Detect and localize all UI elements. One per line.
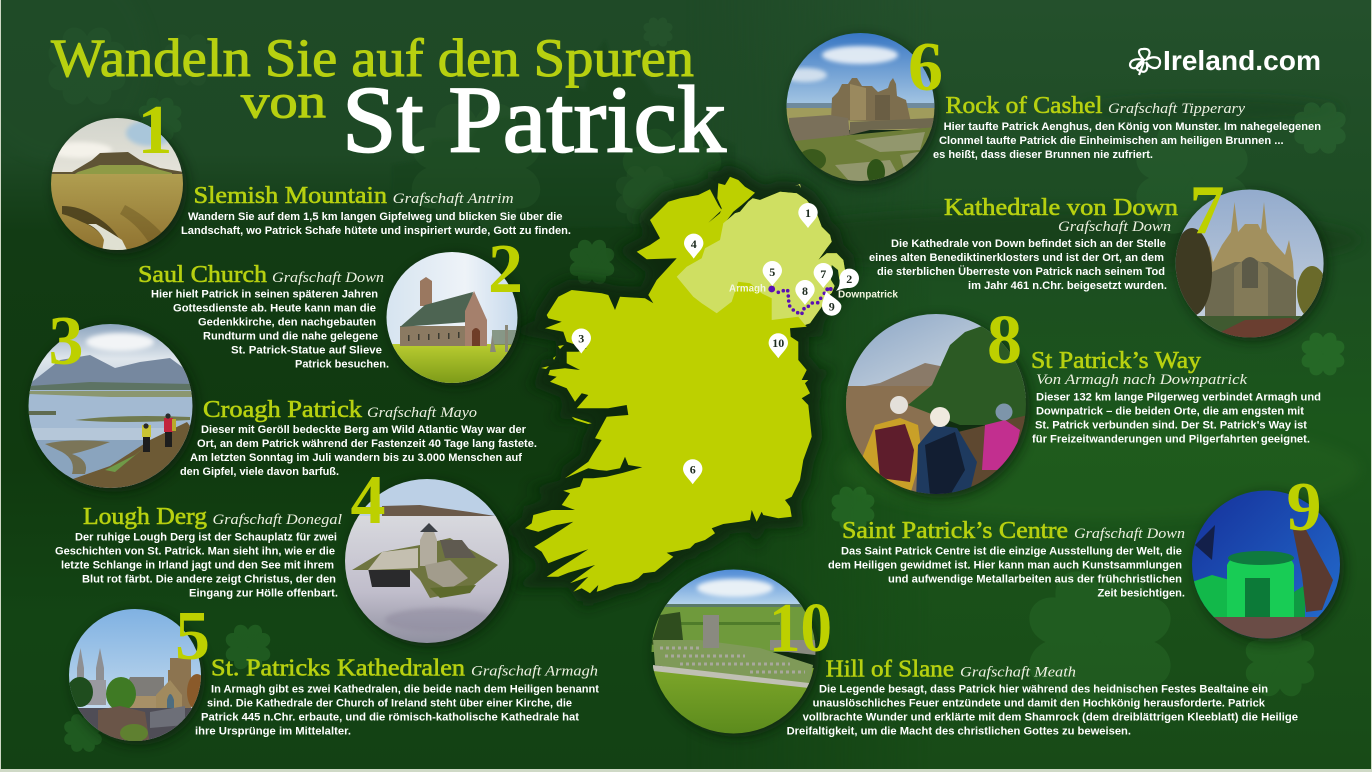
description: Patrick 445 n.Chr. erbaute, und die römisch-katholische Kathedrale hat bbox=[201, 711, 579, 723]
panel: 5 St. Patricks Kathedralen bbox=[69, 609, 599, 741]
photo: Croagh Patrick bbox=[28, 324, 193, 490]
photo: hikers on St Patrick's Way bbox=[845, 313, 1028, 500]
description: Das Saint Patrick Centre ist die einzige Ausstellung der Welt, die bbox=[841, 546, 1182, 558]
logo: Ireland.com bbox=[1130, 45, 1321, 76]
county: Grafschaft Down bbox=[1058, 219, 1171, 235]
county: Grafschaft Donegal bbox=[212, 512, 342, 528]
description: für Freizeitwanderungen und Pilgerfahrten geeignet. bbox=[1032, 434, 1310, 446]
county: Grafschaft Mayo bbox=[367, 405, 478, 421]
title word St Patrick: St Patrick bbox=[342, 67, 727, 173]
description: Hier hielt Patrick in seinen späteren Jahren bbox=[151, 289, 378, 301]
description: ihre Ursprünge im Mittelalter. bbox=[195, 725, 351, 737]
county: Grafschaft Armagh bbox=[471, 664, 598, 680]
number 10: 10 bbox=[769, 590, 832, 667]
description: Der ruhige Lough Derg ist der Schauplatz für zwei bbox=[75, 532, 337, 544]
heading: St. Patricks Kathedralen bbox=[211, 655, 465, 682]
description: den Gipfel, viele davon barfuß. bbox=[180, 466, 339, 478]
description bbox=[1032, 392, 1321, 446]
panel: 4 Lough Derg bbox=[55, 462, 510, 644]
county: Grafschaft Down bbox=[272, 270, 384, 286]
county: Grafschaft Down bbox=[1074, 526, 1185, 542]
description: die sterblichen Überreste von Patrick nach seinem Tod bbox=[877, 265, 1165, 278]
description: Geschichten von St. Patrick. Man sieht ihn, wie er die bbox=[55, 546, 335, 558]
panel: 9 Saint Patrick's Centre bbox=[828, 484, 1340, 638]
pin 1 bbox=[798, 203, 818, 228]
description: eines alten Benediktinerklosters und ist der Ort, an dem bbox=[869, 252, 1164, 264]
title word von: von bbox=[241, 76, 326, 129]
number 2: 2 bbox=[488, 231, 523, 308]
pin 6 bbox=[683, 459, 702, 484]
description: St. Patrick verbunden sind. Der St. Patrick's Way ist bbox=[1035, 420, 1307, 432]
county: Grafschaft Antrim bbox=[393, 191, 514, 207]
panel: 6 Rock of Cashel bbox=[783, 29, 1321, 185]
description: dem Heiligen gewidmet ist. Hier kann man auch Kunstsammlungen bbox=[828, 560, 1182, 572]
panel: 1 Slemish Mountain bbox=[51, 106, 570, 250]
description: Downpatrick – die beiden Orte, die am engsten mit bbox=[1036, 406, 1304, 418]
panel: 7 Kathedrale von Down bbox=[869, 187, 1324, 338]
description: Blut rot färbt. Die andere zeigt Christus, der den bbox=[82, 574, 336, 586]
pin 8 bbox=[795, 280, 815, 305]
heading: Kathedrale von Down bbox=[944, 194, 1178, 221]
map pins bbox=[572, 203, 859, 484]
description: letzte Schlange in Irland jagt und den See mit ihrem bbox=[61, 560, 334, 572]
heading: Croagh Patrick bbox=[203, 396, 363, 423]
description: Ort, an dem Patrick während der Fastenzeit 40 Tage lang fastete. bbox=[197, 438, 537, 450]
number 7: 7 bbox=[1190, 172, 1224, 249]
heading: St Patrick’s Way bbox=[1031, 347, 1202, 374]
county: Grafschaft Tipperary bbox=[1108, 101, 1245, 117]
subtitle: Von Armagh nach Downpatrick bbox=[1036, 372, 1247, 388]
description: im Jahr 461 n.Chr. beigesetzt wurden. bbox=[968, 280, 1167, 292]
label: Armagh: Armagh bbox=[729, 284, 766, 295]
description: unauslöschliches Feuer entzündete und damit den Hochkönig herausforderte. Patrick bbox=[813, 697, 1266, 709]
wordmark: Ireland.com bbox=[1163, 45, 1321, 76]
island bbox=[525, 177, 845, 593]
description: Landschaft, wo Patrick Schafe hütete und inspiriert wurde, Gott zu finden. bbox=[181, 225, 571, 237]
number 4: 4 bbox=[350, 462, 386, 539]
description: Zeit besichtigen. bbox=[1098, 588, 1185, 600]
map of Ireland bbox=[525, 177, 845, 593]
number 9: 9 bbox=[1286, 469, 1322, 546]
number 5: 5 bbox=[175, 598, 210, 675]
description: Eingang zur Hölle offenbart. bbox=[189, 588, 338, 600]
description: Gottesdienste ab. Heute kann man die bbox=[173, 303, 376, 315]
number 3: 3 bbox=[48, 303, 84, 380]
photo: Slemish Mountain bbox=[48, 117, 184, 252]
Rathlin island bbox=[795, 184, 801, 188]
panel: 3 Croagh Patrick bbox=[28, 303, 537, 490]
description: Wandern Sie auf dem 1,5 km langen Gipfelweg und blicken Sie über die bbox=[188, 211, 562, 223]
pin 3: 3 bbox=[578, 332, 584, 346]
pin 1: 1 bbox=[805, 206, 811, 220]
photo: Saint Patrick's Centre at night bbox=[1191, 490, 1341, 641]
description bbox=[869, 238, 1167, 292]
small islands bbox=[541, 345, 592, 424]
map shadow bbox=[525, 177, 845, 593]
heading: Saul Church bbox=[138, 261, 267, 288]
pin 10: 10 bbox=[772, 336, 784, 350]
pin 2 bbox=[836, 269, 859, 291]
description bbox=[787, 683, 1298, 737]
description: Hier taufte Patrick Aenghus, den König von Munster. Im nahegelegenen bbox=[944, 121, 1321, 133]
pin 4 bbox=[684, 234, 703, 259]
photo: Armagh cathedrals bbox=[67, 608, 207, 745]
description bbox=[195, 683, 599, 737]
heading: Slemish Mountain bbox=[194, 182, 387, 209]
description: und aufwendige Metallarbeiten aus der frühchristlichen bbox=[888, 574, 1182, 586]
photo: Lough Derg bbox=[345, 478, 510, 644]
description: sind. Die Kathedrale der Church of Ireland steht über einer Kirche, die bbox=[207, 697, 572, 709]
description: Gedenkkirche, den nachgebauten bbox=[198, 317, 376, 329]
panel: 10 Hill of Slane bbox=[651, 569, 1298, 737]
pin 7: 7 bbox=[820, 267, 826, 281]
pin 5 bbox=[763, 261, 782, 286]
pin 10 bbox=[769, 333, 788, 358]
description: Am letzten Sonntag im Juli wandern bis zu 3.000 Menschen auf bbox=[190, 452, 522, 464]
description: Patrick besuchen. bbox=[295, 359, 389, 371]
description: In Armagh gibt es zwei Kathedralen, die beide nach dem Heiligen benannt bbox=[211, 683, 599, 695]
pin 8: 8 bbox=[802, 284, 808, 298]
description bbox=[181, 211, 571, 237]
photo: Down Cathedral bbox=[1172, 189, 1327, 340]
panel: 2 Saul Church bbox=[139, 246, 520, 383]
photo: Saul Church bbox=[386, 252, 518, 384]
number 6: 6 bbox=[908, 29, 943, 106]
heading: Hill of Slane bbox=[826, 656, 954, 683]
title bbox=[51, 28, 727, 173]
background: Rock of Cashel silhouette bbox=[392, 40, 735, 230]
route: St Patrick's Way, dotted bbox=[768, 286, 833, 315]
description: Die Kathedrale von Down befindet sich an der Stelle bbox=[891, 238, 1166, 250]
Northern Ireland region bbox=[677, 192, 845, 325]
pin 5: 5 bbox=[769, 265, 775, 279]
pin 9 bbox=[822, 291, 841, 316]
description: Dreifaltigkeit, um die Macht des christlichen Gottes zu beweisen. bbox=[787, 725, 1131, 737]
description: es heißt, dass dieser Brunnen nie zufriert. bbox=[933, 149, 1153, 161]
label: Downpatrick: Downpatrick bbox=[838, 289, 898, 300]
number 8: 8 bbox=[987, 302, 1022, 379]
panel: 8 St Patrick's Way bbox=[845, 302, 1321, 500]
description: St. Patrick-Statue auf Slieve bbox=[231, 345, 382, 357]
pin 4: 4 bbox=[691, 237, 697, 251]
description bbox=[933, 121, 1321, 161]
description bbox=[55, 532, 338, 600]
pin 7 bbox=[814, 263, 833, 288]
description: Dieser 132 km lange Pilgerweg verbindet Armagh und bbox=[1036, 392, 1321, 404]
heading: Saint Patrick’s Centre bbox=[842, 517, 1068, 544]
description bbox=[828, 546, 1185, 600]
pin 6: 6 bbox=[690, 462, 696, 476]
heading: Lough Derg bbox=[83, 503, 207, 530]
description bbox=[151, 289, 389, 371]
description: Clonmel taufte Patrick die Einheimischen am heiligen Brunnen ... bbox=[939, 135, 1284, 147]
photo: Rock of Cashel bbox=[783, 32, 937, 185]
Strangford Lough bbox=[831, 265, 840, 288]
county: Grafschaft Meath bbox=[960, 665, 1076, 681]
title line one: Wandeln Sie auf den Spuren bbox=[51, 28, 694, 88]
pin 3 bbox=[572, 328, 591, 354]
number 1: 1 bbox=[138, 92, 172, 169]
icon: shamrock logo bbox=[1130, 49, 1160, 75]
pin 9: 9 bbox=[829, 300, 835, 314]
description bbox=[180, 424, 537, 478]
photo: Hill of Slane bbox=[651, 569, 817, 736]
description: Dieser mit Geröll bedeckte Berg am Wild Atlantic Way war der bbox=[201, 424, 527, 436]
description: vollbrachte Wunder und erklärte mit dem Shamrock (dem dreiblättrigen Kleeblatt) die Heilige bbox=[803, 711, 1298, 723]
pin 2: 2 bbox=[846, 272, 852, 286]
heading: Rock of Cashel bbox=[946, 92, 1103, 119]
description: Rundturm und die nahe gelegene bbox=[203, 331, 378, 343]
description: Die Legende besagt, dass Patrick hier während des heidnischen Festes Bealtaine ein bbox=[819, 683, 1268, 695]
